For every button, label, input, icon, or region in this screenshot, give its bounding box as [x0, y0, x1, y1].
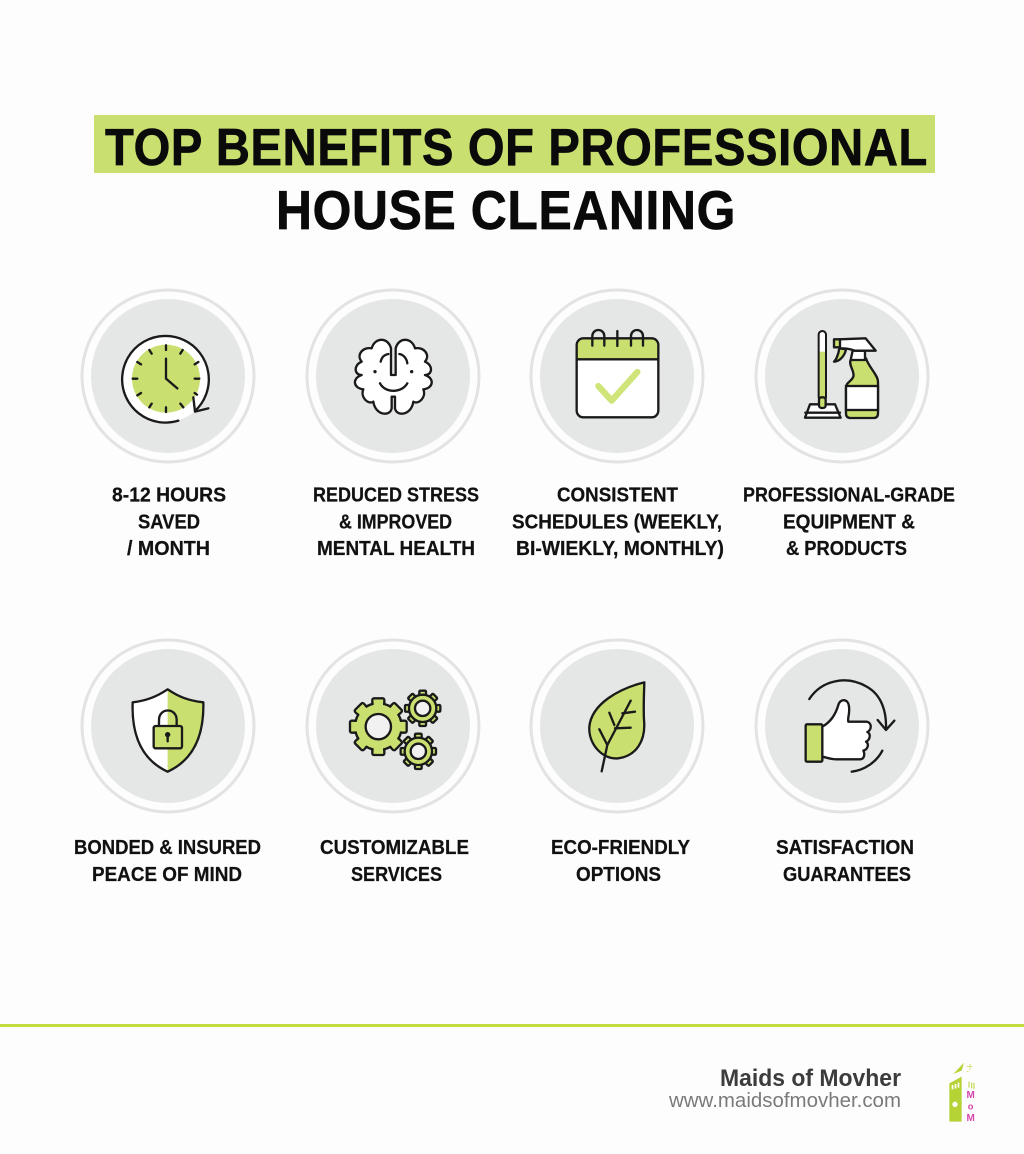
title: HOUSE CLEANING	[276, 179, 736, 241]
panel: consistent schedules	[512, 290, 724, 560]
logo: Maids of Movher building: o	[968, 1102, 974, 1112]
footer brand text: Maids of Movher	[720, 1065, 901, 1092]
label: & PRODUCTS	[786, 538, 907, 560]
panel: customizable services	[307, 640, 479, 886]
label: BONDED & INSURED	[74, 837, 261, 859]
icon: gears	[350, 691, 440, 769]
icon: leaf	[589, 682, 644, 771]
label	[743, 484, 955, 560]
icon: mop and spray bottle	[805, 331, 878, 418]
label: 8-12 HOURS	[112, 484, 226, 506]
label	[776, 837, 914, 886]
icon: clock	[122, 335, 209, 423]
label: PROFESSIONAL-GRADE	[743, 484, 955, 506]
logo: Maids of Movher building: M	[966, 1090, 975, 1101]
label: REDUCED STRESS	[313, 484, 479, 506]
panel: satisfaction guarantees	[756, 640, 928, 886]
title: TOP BENEFITS OF PROFESSIONAL	[105, 119, 928, 177]
icon: calendar with check	[577, 330, 658, 417]
label: & IMPROVED	[339, 512, 452, 534]
label	[74, 837, 261, 886]
icon: shield with padlock	[133, 689, 203, 772]
label: CUSTOMIZABLE	[320, 837, 469, 859]
label: SATISFACTION	[776, 837, 914, 859]
label: SERVICES	[351, 864, 442, 886]
label	[551, 837, 691, 886]
logo: Maids of Movher building: M	[966, 1113, 975, 1124]
label: GUARANTEES	[783, 864, 911, 886]
panel: bonded and insured	[74, 640, 261, 886]
label: BI-WIEKLY, MONTHLY)	[516, 538, 724, 560]
label: ECO-FRIENDLY	[551, 837, 691, 859]
panel: reduced stress	[307, 290, 479, 560]
panel: professional-grade equipment	[743, 290, 955, 560]
label	[313, 484, 479, 560]
label: EQUIPMENT &	[783, 512, 915, 534]
label: / MONTH	[127, 538, 210, 560]
icon: smiling brain	[355, 340, 432, 414]
panel: 8-12 hours saved	[82, 290, 254, 560]
label: MENTAL HEALTH	[317, 538, 475, 560]
label	[112, 484, 226, 560]
icon: thumbs up with circular arrow	[806, 680, 894, 772]
logo: Maids of Movher building	[949, 1063, 975, 1124]
label: OPTIONS	[576, 864, 661, 886]
title	[94, 115, 935, 241]
footer brand text	[668, 1065, 901, 1112]
label: PEACE OF MIND	[92, 864, 242, 886]
label	[512, 484, 724, 560]
label	[320, 837, 469, 886]
panel: eco-friendly options	[531, 640, 703, 886]
footer brand text: www.maidsofmovher.com	[668, 1090, 901, 1112]
label: SAVED	[138, 512, 200, 534]
label: CONSISTENT	[557, 484, 678, 506]
label: SCHEDULES (WEEKLY,	[512, 512, 722, 534]
